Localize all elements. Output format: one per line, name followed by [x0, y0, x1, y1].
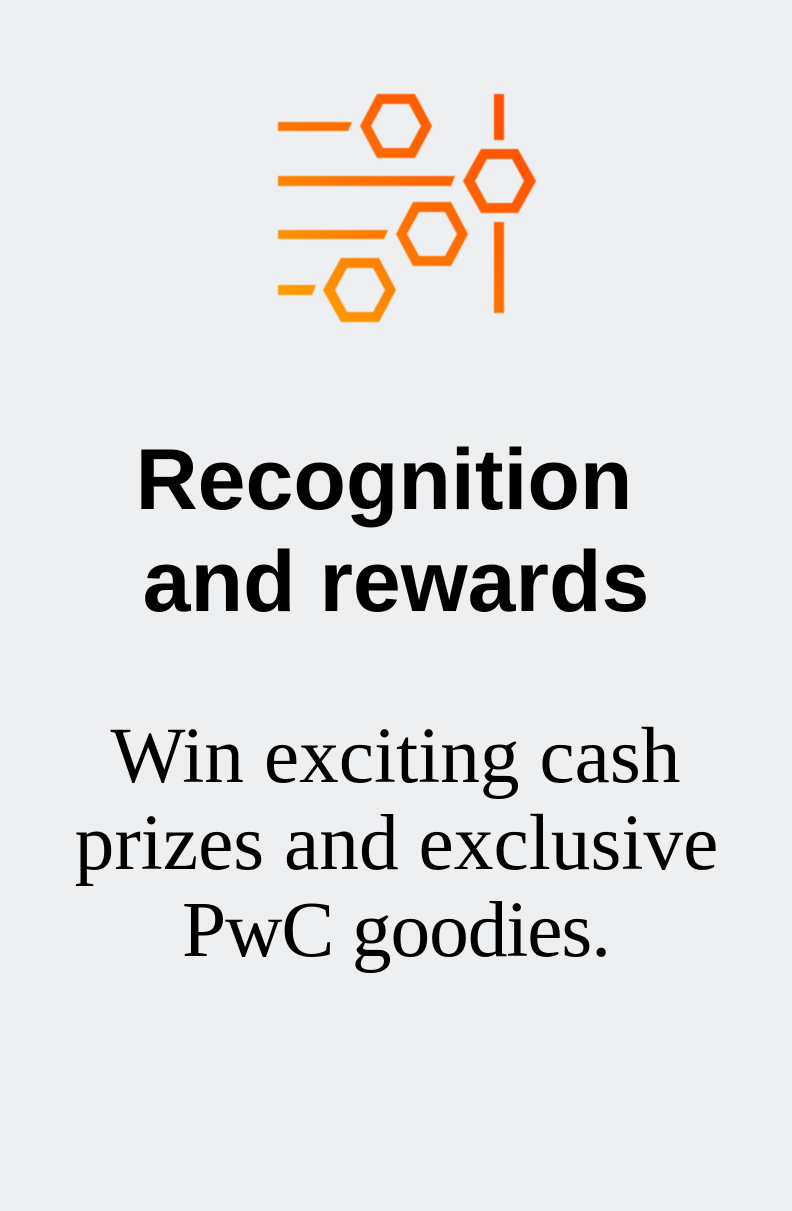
body text: prizes and exclusive	[75, 799, 718, 887]
body text: PwC goodies.	[182, 886, 610, 974]
heading	[136, 432, 649, 630]
icon: hexagon sliders	[277, 93, 537, 323]
body text	[75, 712, 718, 974]
heading: and rewards	[143, 534, 649, 630]
heading: Recognition	[136, 432, 632, 528]
body text: Win exciting cash	[110, 712, 680, 800]
